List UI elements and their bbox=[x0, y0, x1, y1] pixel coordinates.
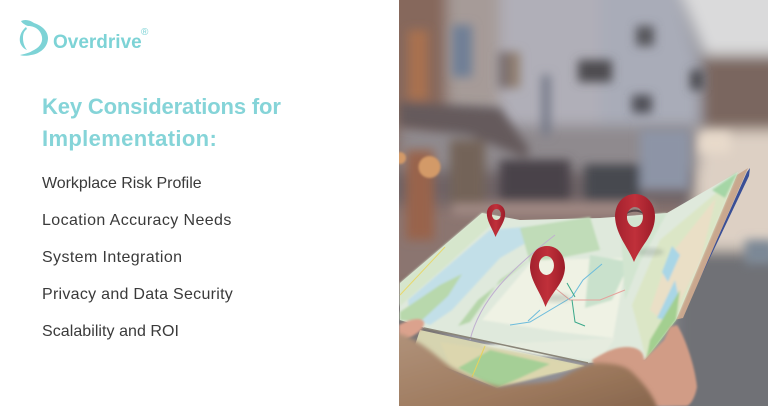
map: back page edge bbox=[681, 168, 750, 320]
right hand bbox=[592, 325, 697, 406]
pin: large right bbox=[615, 194, 664, 262]
logo bbox=[20, 20, 149, 56]
heading bbox=[42, 94, 281, 151]
map: fold edge bbox=[424, 328, 588, 363]
pin: large centre bbox=[530, 246, 570, 307]
list item 3: System Integration bbox=[42, 249, 182, 266]
left thumb bbox=[399, 319, 424, 342]
pin: small bbox=[487, 204, 505, 237]
photo: hands holding a map with location pins bbox=[399, 0, 768, 406]
background: blurred street bbox=[385, 0, 768, 406]
wordmark: Overdrive bbox=[53, 32, 142, 53]
heading: Key Considerations for bbox=[42, 94, 281, 119]
icon: overdrive swirl bbox=[20, 20, 48, 56]
map: main sheet bbox=[400, 172, 738, 363]
list item 1: Workplace Risk Profile bbox=[42, 175, 202, 192]
map: lower sheet bbox=[415, 330, 585, 388]
list item 5: Scalability and ROI bbox=[42, 323, 179, 340]
bokeh lights bbox=[418, 156, 440, 178]
map: land colours bbox=[400, 172, 738, 388]
list item 4: Privacy and Data Security bbox=[42, 286, 233, 303]
sleeve bbox=[396, 333, 658, 406]
heading: Implementation: bbox=[42, 126, 217, 151]
registered mark: ® bbox=[141, 27, 149, 38]
list: considerations bbox=[42, 175, 233, 340]
list item 2: Location Accuracy Needs bbox=[42, 212, 232, 229]
map: routes bbox=[400, 235, 625, 377]
